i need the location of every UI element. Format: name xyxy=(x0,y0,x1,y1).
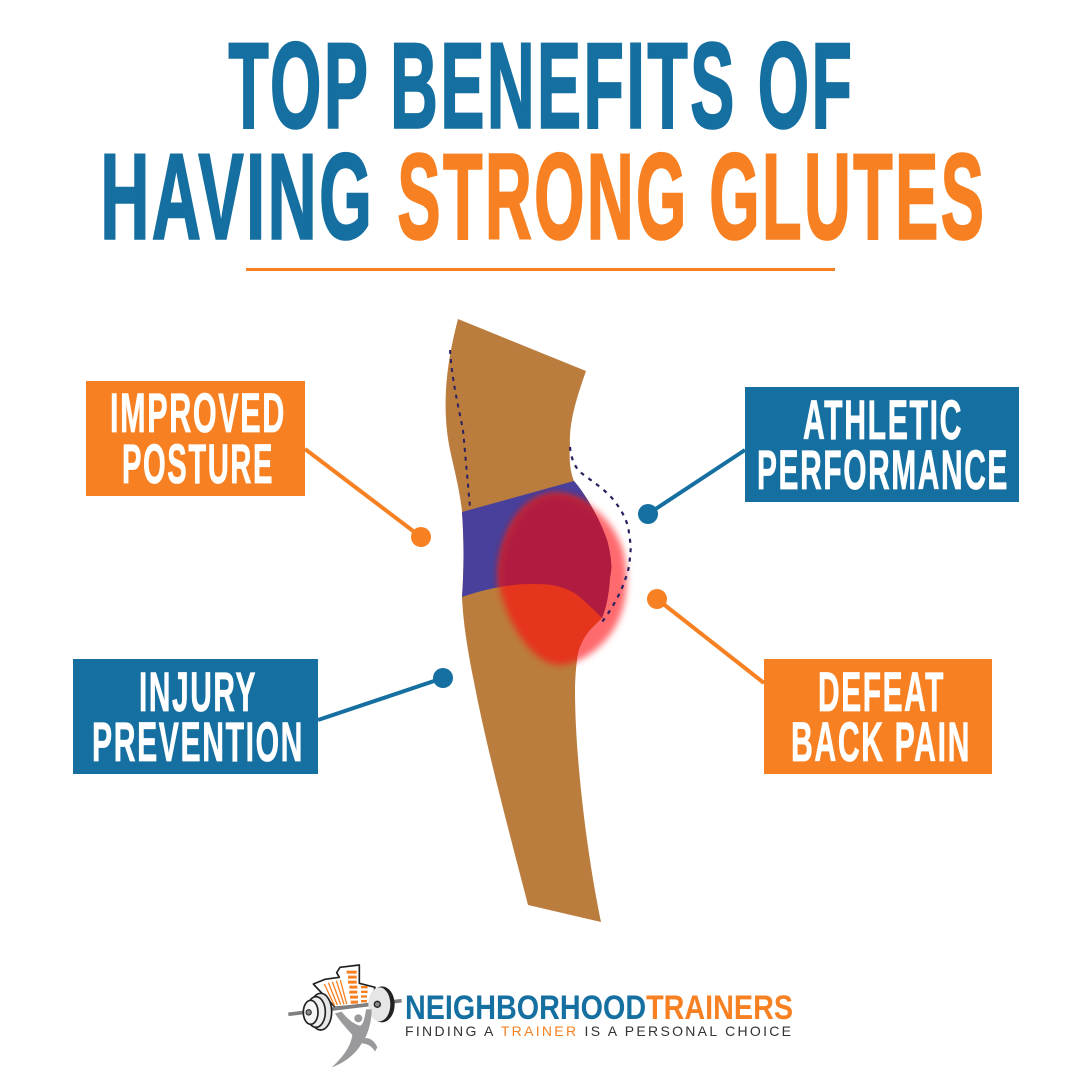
callout: injury prevention xyxy=(73,659,453,774)
icon: weightlifter with city xyxy=(288,965,402,1067)
body illustration with glute highlight xyxy=(446,319,631,922)
title: HAVING xyxy=(100,128,374,264)
dotted outline: enlarged glute xyxy=(570,447,631,622)
callout: defeat back pain xyxy=(647,589,992,774)
callout: improved posture xyxy=(86,381,431,547)
callout: improved posture: POSTURE xyxy=(122,432,274,495)
callout: injury prevention: INJURY xyxy=(139,660,257,723)
dotted outline: back xyxy=(450,350,470,507)
wordmark: NEIGHBORHOODTRAINERS xyxy=(405,989,793,1027)
tagline: FINDING A TRAINER IS A PERSONAL CHOICE xyxy=(405,1023,791,1039)
callout: defeat back pain: DEFEAT xyxy=(818,660,945,723)
callout: improved posture: IMPROVED xyxy=(110,381,286,444)
logo xyxy=(288,965,793,1067)
callout: injury prevention: PREVENTION xyxy=(92,710,304,773)
title xyxy=(100,18,986,264)
callout: athletic performance xyxy=(638,387,1019,524)
